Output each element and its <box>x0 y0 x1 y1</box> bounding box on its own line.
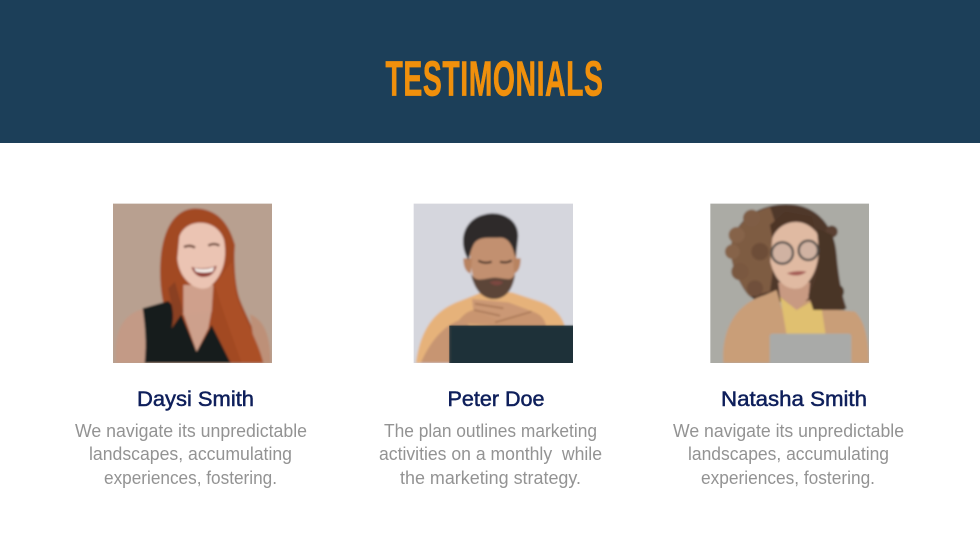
name: Daysi Smith <box>137 388 254 411</box>
photo: man with folded hands behind laptop <box>410 200 577 367</box>
title: TESTIMONIALS <box>386 52 604 106</box>
testimonial text: experiences, fostering. <box>104 468 277 488</box>
testimonial text: We navigate its unpredictable <box>75 421 307 441</box>
testimonial text: landscapes, accumulating <box>688 444 889 464</box>
name: Peter Doe <box>448 388 544 411</box>
testimonial text: experiences, fostering. <box>701 468 875 488</box>
photo: curly-haired woman with glasses holding laptop <box>705 200 872 367</box>
testimonial text: the marketing strategy. <box>400 468 581 488</box>
testimonial text: The plan outlines marketing <box>384 421 597 441</box>
name: Natasha Smith <box>721 388 867 411</box>
testimonial text <box>75 421 307 488</box>
header band <box>0 0 980 143</box>
testimonial text: We navigate its unpredictable <box>673 421 904 441</box>
panel: Natasha Smith testimonial <box>673 200 904 488</box>
photo: smiling woman with long red hair <box>110 200 277 367</box>
panel: Daysi Smith testimonial <box>75 200 307 488</box>
panel: Peter Doe testimonial <box>379 200 602 488</box>
testimonial text: landscapes, accumulating <box>89 444 292 464</box>
testimonial text: activities on a monthly while <box>379 444 602 464</box>
testimonial text <box>379 421 602 488</box>
testimonial text <box>673 421 904 488</box>
